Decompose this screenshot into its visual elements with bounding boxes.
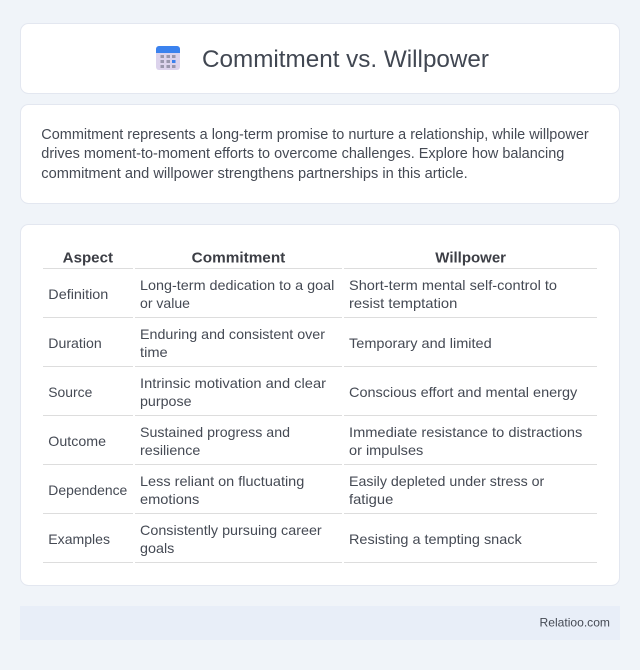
row: Source (48, 375, 577, 409)
row: Duration (48, 326, 492, 360)
row: Source: Conscious effort and mental energy (349, 384, 577, 400)
table header: Willpower (435, 250, 506, 267)
row: Examples: Examples (48, 531, 110, 547)
row: Dependence: Less reliant on fluctuating (140, 473, 304, 489)
row: Examples: goals (140, 540, 174, 556)
row: Outcome: or impulses (349, 442, 423, 458)
row: Dependence: Easily depleted under stress or (349, 473, 545, 489)
row: Dependence: emotions (140, 491, 199, 507)
panel: comparison table (20, 224, 620, 586)
row: Dependence (48, 473, 545, 507)
title: Commitment vs. Willpower (202, 46, 489, 73)
panel: title card (20, 24, 620, 94)
row: Definition: Short-term mental self-control to (349, 277, 557, 293)
row: Definition: or value (140, 295, 190, 311)
row: Definition (48, 277, 557, 311)
row: Outcome (48, 424, 582, 458)
row: Outcome: Sustained progress and (140, 424, 290, 440)
row: Duration: Duration (48, 335, 102, 351)
text block: introduction (41, 127, 589, 182)
row: Duration: time (140, 344, 168, 360)
row: Duration: Temporary and limited (349, 335, 492, 351)
row: Duration: Enduring and consistent over (140, 326, 325, 342)
row: Outcome: resilience (140, 442, 201, 458)
row: Examples: Resisting a tempting snack (349, 531, 523, 547)
table header: Commitment (192, 250, 285, 267)
footer text: Relatioo.com (540, 616, 610, 630)
text block: introduction: drives moment-to-moment efforts to overcome challenges. Explore how balancing (41, 146, 564, 162)
row: Definition: resist temptation (349, 295, 457, 311)
row: Source: Intrinsic motivation and clear (140, 375, 326, 391)
table header (63, 250, 506, 267)
row: Examples: Consistently pursuing career (140, 522, 322, 538)
text block: introduction: Commitment represents a long-term promise to nurture a relationship, while willpower (41, 127, 589, 143)
row: Dependence: Dependence (48, 482, 128, 498)
row: Definition: Definition (48, 286, 108, 302)
table header: Aspect (63, 250, 113, 267)
row: Dependence: fatigue (349, 491, 394, 507)
icon: calendar (156, 46, 180, 70)
row: Examples (48, 522, 523, 556)
row: Outcome: Immediate resistance to distractions (349, 424, 582, 440)
row: Definition: Long-term dedication to a goal (140, 277, 334, 293)
text block: introduction: commitment and willpower strengthens partnerships in this article. (41, 166, 468, 182)
row: Source: purpose (140, 393, 192, 409)
footer (20, 606, 620, 640)
panel: introduction (20, 104, 620, 204)
row: Outcome: Outcome (48, 433, 106, 449)
row: Source: Source (48, 384, 93, 400)
